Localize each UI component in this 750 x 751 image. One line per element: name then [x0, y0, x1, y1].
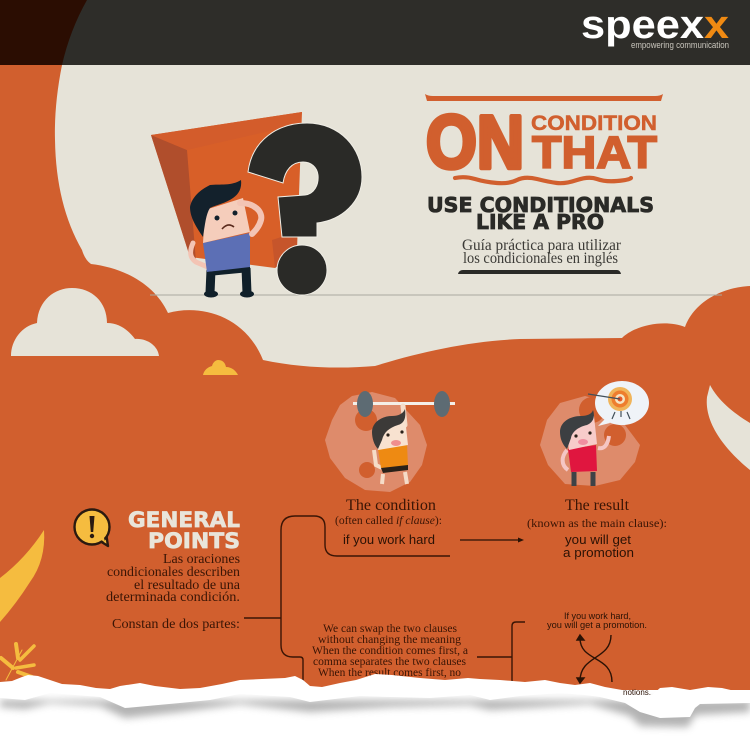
- title: ON: ON: [426, 100, 524, 184]
- title: THAT: THAT: [532, 127, 657, 178]
- illustration: man with target: [540, 381, 649, 486]
- paper below tear: [0, 690, 750, 751]
- leaf: right cream: [707, 385, 750, 470]
- result caption: The result: [565, 497, 630, 514]
- subtitle: USE CONDITIONALS: [427, 193, 654, 217]
- icon: exclamation bubble: [74, 510, 110, 546]
- cream hero shape: [55, 65, 750, 368]
- barbell plates: [357, 391, 450, 417]
- condition caption: [335, 497, 442, 547]
- title: CONDITION: CONDITION: [531, 112, 657, 135]
- text: explanation: condicionales describen: [107, 564, 240, 579]
- text: explanation: determinada condición.: [106, 589, 240, 604]
- condition caption: if you work hard: [343, 533, 435, 547]
- condition caption: The condition: [346, 497, 436, 514]
- header dark corner: [0, 0, 87, 65]
- torn paper edge: [0, 674, 750, 751]
- illustration: confused man with question mark: [151, 112, 362, 298]
- title block: [425, 94, 663, 274]
- swap example text: If you work hard,: [564, 611, 631, 622]
- subtitle: LIKE A PRO: [476, 210, 604, 234]
- title wave: [455, 177, 631, 183]
- white torn band: [0, 674, 750, 718]
- heading: general points: POINTS: [148, 529, 240, 553]
- swap explanation text: We can swap the two clauses: [323, 621, 457, 635]
- arrow: [460, 538, 524, 542]
- text: explanation: el resultado de una: [134, 577, 240, 592]
- swap explanation text: [312, 621, 469, 679]
- box: [151, 112, 302, 268]
- cloud: cream: [11, 288, 159, 356]
- subtitle: [427, 193, 654, 234]
- tear shadow: [0, 700, 750, 727]
- result caption: you will get: [565, 533, 632, 547]
- swap explanation text: comma separates the two clauses: [313, 654, 466, 668]
- result caption: (known as the main clause):: [527, 518, 667, 530]
- subtitle underline: [458, 270, 621, 274]
- question mark: [248, 123, 362, 295]
- leaf: left yellow: [0, 530, 44, 622]
- result caption: a promotion: [563, 546, 634, 560]
- header bar: [0, 0, 750, 65]
- illustration: weightlifter: [325, 391, 455, 492]
- Spanish description: Guía práctica para utilizar: [462, 237, 622, 254]
- heading: general points: [128, 508, 240, 553]
- Spanish description: [462, 237, 622, 267]
- swap example text: you will get a promotion.: [547, 620, 647, 631]
- swap explanation text: When the condition comes first, a: [312, 643, 469, 657]
- logo accent x: x: [704, 3, 729, 47]
- logo: speexx: speex: [581, 3, 704, 47]
- speech bubble with target: [588, 381, 649, 426]
- swap explanation text: When the result comes first, no: [318, 665, 461, 679]
- text: explanation: Constan de dos partes:: [112, 616, 240, 631]
- Spanish description: los condicionales en inglés: [463, 250, 618, 267]
- logo tagline: empowering communication: [631, 40, 729, 51]
- icon: crossed swap arrows: [577, 635, 612, 683]
- text fragment on tear: notions.: [623, 688, 651, 697]
- cloud: yellow: [203, 360, 238, 375]
- ground line: [150, 294, 722, 296]
- title top rule: [425, 94, 663, 101]
- heading: general points: GENERAL: [128, 508, 240, 532]
- man: [190, 180, 261, 298]
- text: explanation: [106, 551, 240, 631]
- result caption: [527, 497, 667, 560]
- text: explanation: Las oraciones: [163, 551, 240, 566]
- condition caption: (often called if clause):: [335, 515, 442, 527]
- swap explanation text: without changing the meaning: [318, 632, 461, 646]
- connector: bracket lines: [244, 516, 525, 685]
- swap example text: [547, 611, 647, 631]
- plant: small yellow: [1, 644, 34, 680]
- general points block: [74, 508, 240, 631]
